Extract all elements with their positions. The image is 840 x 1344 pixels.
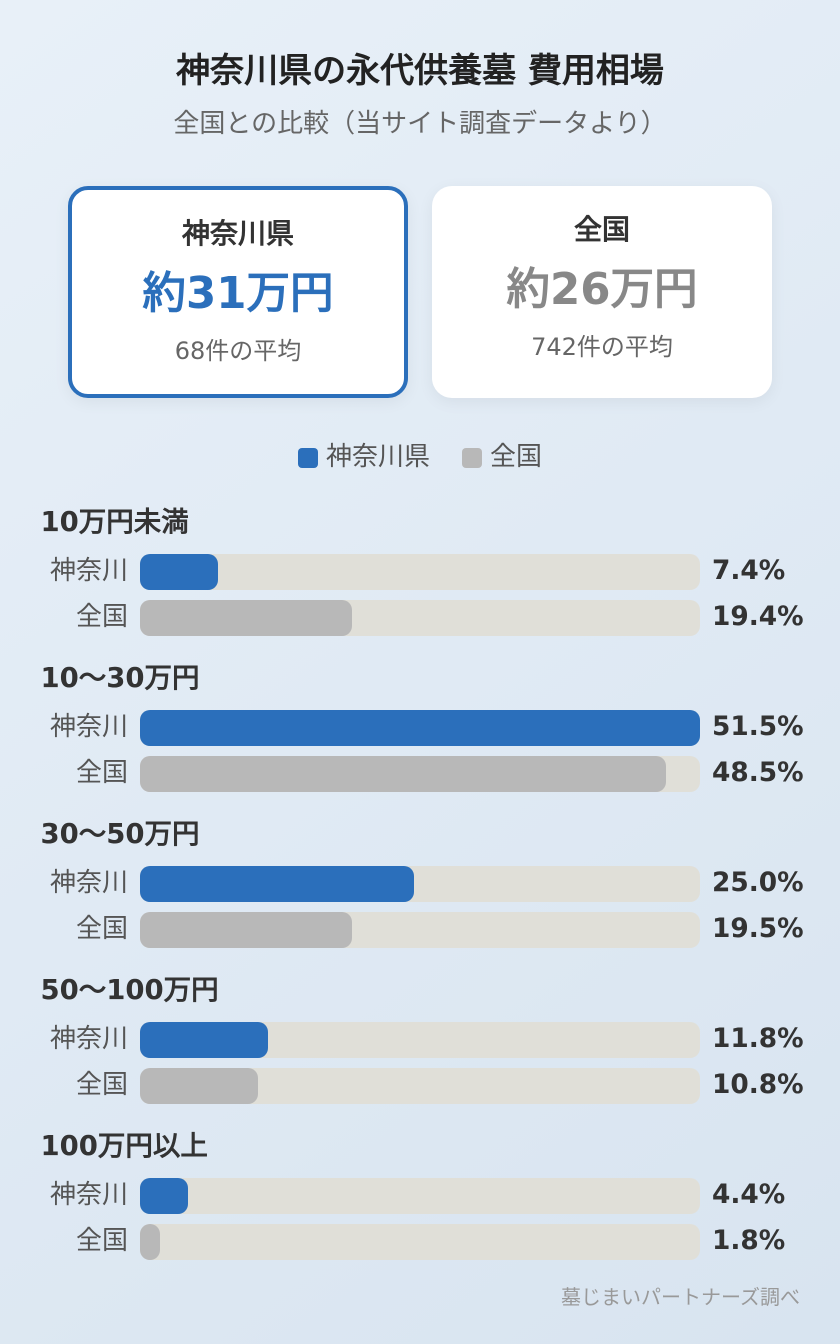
- value: 19.4%: [712, 601, 804, 632]
- bar: national 19.4%: [140, 600, 700, 636]
- bar group: under 100,000 yen: [40, 506, 804, 636]
- group heading: 30〜50万円: [40, 818, 200, 850]
- legend label: Kanagawa: 神奈川県: [326, 442, 430, 472]
- card value: Kanagawa: 約31万円: [142, 269, 334, 319]
- card note: Kanagawa: 68件の平均: [175, 337, 301, 365]
- group heading: 50〜100万円: [40, 974, 219, 1006]
- bar: Kanagawa 4.4%: [140, 1178, 700, 1214]
- bar group: 100,000 to 300,000 yen: [40, 662, 804, 792]
- legend: [298, 442, 542, 472]
- card value: national: 約26万円: [506, 265, 698, 315]
- value: 48.5%: [712, 757, 804, 788]
- legend swatch: Kanagawa: [298, 448, 318, 468]
- row label: 全国: [76, 1226, 128, 1256]
- bar: national 1.8%: [140, 1224, 700, 1260]
- row label: 全国: [76, 914, 128, 944]
- value: 10.8%: [712, 1069, 804, 1100]
- value: 4.4%: [712, 1179, 785, 1210]
- bar group: 300,000 to 500,000 yen: [40, 818, 804, 948]
- bar group: 500,000 to 1,000,000 yen: [40, 974, 804, 1104]
- row label: 全国: [76, 1070, 128, 1100]
- row label: 神奈川: [50, 1180, 128, 1210]
- panel: national summary card: [432, 186, 772, 398]
- row label: 神奈川: [50, 712, 128, 742]
- value: 19.5%: [712, 913, 804, 944]
- bar: Kanagawa 7.4%: [140, 554, 700, 590]
- legend swatch: national: [462, 448, 482, 468]
- bar: national 10.8%: [140, 1068, 700, 1104]
- bar: Kanagawa 25.0%: [140, 866, 700, 902]
- row label: 神奈川: [50, 868, 128, 898]
- row label: 全国: [76, 602, 128, 632]
- title: 神奈川県の永代供養墓 費用相場: [176, 51, 664, 91]
- group heading: 10万円未満: [40, 506, 189, 538]
- legend label: national: 全国: [490, 442, 542, 472]
- subtitle: 全国との比較（当サイト調査データより）: [173, 109, 667, 139]
- panel: Kanagawa summary card: [68, 186, 408, 398]
- value: 11.8%: [712, 1023, 804, 1054]
- value: 1.8%: [712, 1225, 785, 1256]
- value: 51.5%: [712, 711, 804, 742]
- card label: Kanagawa: 神奈川県: [182, 217, 294, 250]
- row label: 神奈川: [50, 1024, 128, 1054]
- value: 25.0%: [712, 867, 804, 898]
- card label: national: 全国: [574, 213, 630, 246]
- bar group: 1,000,000 yen or more: [40, 1130, 785, 1260]
- value: 7.4%: [712, 555, 785, 586]
- group heading: 10〜30万円: [40, 662, 200, 694]
- bar: Kanagawa 51.5%: [140, 710, 700, 746]
- bar: national 48.5%: [140, 756, 700, 792]
- card note: national: 742件の平均: [531, 333, 673, 361]
- bar: Kanagawa 11.8%: [140, 1022, 700, 1058]
- group heading: 100万円以上: [40, 1130, 208, 1162]
- row label: 神奈川: [50, 556, 128, 586]
- source note: 墓じまいパートナーズ調べ: [561, 1285, 800, 1309]
- bar: national 19.5%: [140, 912, 700, 948]
- row label: 全国: [76, 758, 128, 788]
